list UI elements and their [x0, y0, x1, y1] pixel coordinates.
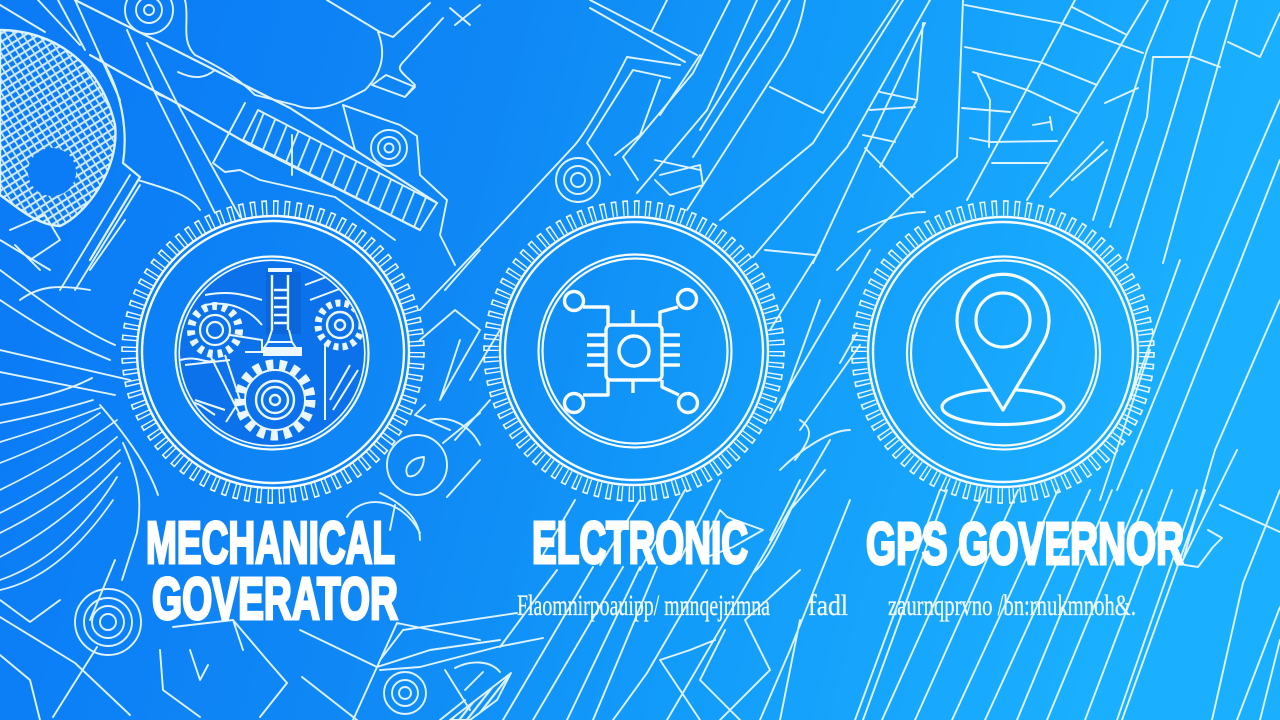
panel: mechanical governor emblem — [122, 201, 424, 503]
icon: gears and governor column — [180, 261, 364, 445]
outer double ring — [868, 217, 1138, 487]
small bearing circle — [371, 130, 407, 166]
large gear — [240, 365, 310, 435]
column — [263, 268, 302, 356]
heading: mechanical governor: GOVERATOR — [152, 566, 398, 632]
mid connection linework — [420, 0, 805, 310]
icon: microchip — [564, 290, 698, 412]
toothed ring — [484, 201, 784, 501]
inner double ring — [176, 256, 368, 450]
toothed ring — [122, 201, 424, 503]
drop circle — [387, 435, 447, 495]
right gear — [318, 303, 362, 347]
left gear — [191, 306, 239, 354]
hatched strip — [243, 110, 437, 230]
right side long lines — [1100, 100, 1280, 720]
caption text — [517, 589, 1136, 622]
inner double ring — [538, 254, 732, 448]
panel: GPS governor emblem — [852, 201, 1154, 503]
inner double ring — [907, 256, 1100, 450]
lower middle lines — [380, 440, 850, 720]
top bearing circle — [125, 0, 173, 34]
heading: mechanical governor: MECHANICAL — [146, 510, 395, 576]
outer double ring — [137, 216, 409, 488]
bottom-left spiral — [75, 589, 141, 655]
left side fan — [0, 400, 120, 590]
lower middle bolt — [445, 662, 511, 720]
caption text: fadl — [808, 589, 848, 622]
icon: location pin — [942, 274, 1064, 424]
heading: electronic: ELCTRONIC — [532, 510, 748, 576]
heading: mechanical governor — [146, 510, 398, 632]
toothed ring — [852, 201, 1154, 503]
panel: electronic governor emblem — [484, 201, 784, 501]
caption text: Flaomnirpoauipp/ mnnqejrimna — [517, 589, 770, 622]
outer double ring — [500, 217, 768, 485]
caption text: zaurnqprvno /bn:rnukmnoh&. — [888, 589, 1136, 622]
mesh disc — [0, 30, 115, 226]
